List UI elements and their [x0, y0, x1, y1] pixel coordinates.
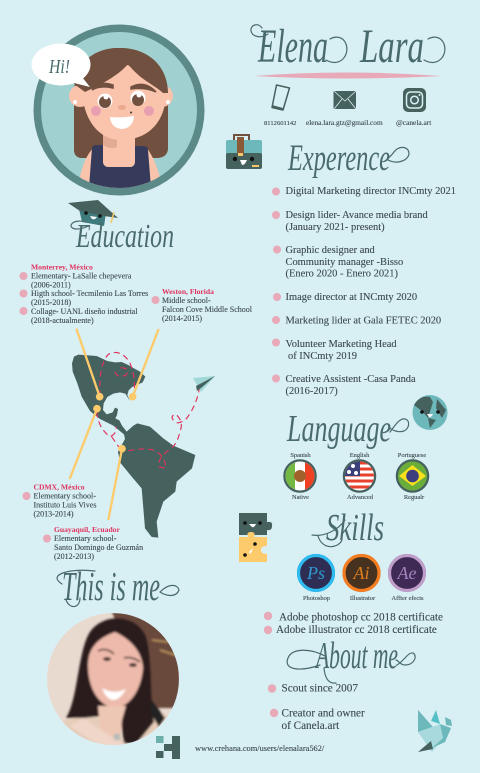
skill: Photoshop	[297, 554, 335, 602]
experience item 5: Marketing lider at Gala FETEC 2020	[286, 316, 441, 326]
skill: After effects	[388, 554, 426, 602]
education: CDMX: CDMX, México	[34, 482, 85, 492]
education: Monterrey: Collage- UANL diseño industrial	[31, 307, 138, 316]
skill: Photoshop: Photoshop	[303, 595, 330, 602]
experience item 6: Volunteer Marketing Head	[286, 339, 397, 350]
experience item 7: (2016-2017)	[286, 386, 338, 397]
education: Weston	[152, 287, 253, 323]
experience item 2: (January 2021- present)	[286, 222, 385, 233]
education: Monterrey: Higth school- Tecmilenio Las Torres	[31, 289, 148, 298]
skill: After effects: Affter efects	[392, 595, 424, 602]
dashed flight path	[97, 352, 199, 468]
list: experience	[272, 186, 456, 397]
language: Spanish: Native	[292, 494, 309, 501]
education: Monterrey: (2006-2011)	[31, 280, 71, 290]
language: Portuguese	[397, 452, 428, 501]
education: Guayaquil: Elementary school-	[54, 534, 117, 543]
heading: This is me	[57, 563, 179, 609]
education: CDMX: Elementary school-	[34, 492, 96, 500]
heading: Education	[71, 218, 174, 255]
education: Guayaquil: Guayaquil, Ecuador	[54, 525, 120, 534]
experience item 3	[273, 245, 403, 280]
skill: Illustrator	[342, 554, 380, 602]
list: about me	[268, 682, 365, 732]
list: certificates: Adobe photoshop cc 2018 certificate	[279, 612, 443, 624]
website link: www.crehana.com/users/elenalara562/	[195, 744, 325, 753]
list: about me: Scout since 2007	[282, 682, 358, 694]
name title: Lara	[359, 20, 424, 73]
icon: paper plane	[193, 376, 215, 392]
skill: Photoshop: Ps	[306, 563, 325, 583]
experience item 3: (Enero 2020 - Enero 2021)	[286, 268, 398, 280]
contact: instagram: @canela.art	[396, 118, 432, 127]
list: certificates	[264, 612, 443, 636]
experience item 4: Image director at INCmty 2020	[286, 292, 417, 303]
icon: puzzle pieces	[239, 513, 272, 562]
speech bubble: Hi!	[32, 44, 90, 87]
heading: Skills: Skills	[326, 507, 384, 549]
portrait avatar	[34, 24, 204, 200]
speech bubble: Hi!: Hi!	[48, 56, 70, 78]
icon: globe	[412, 395, 448, 430]
education: CDMX: Instituto Luis Vives	[34, 500, 96, 510]
heading: Education: Education	[75, 218, 174, 255]
icon: crehana logo	[156, 736, 180, 759]
heading: Language: Language	[286, 408, 391, 450]
education: Weston: Weston, Florida	[162, 287, 214, 296]
experience item 1: Digital Marketing director INCmty 2021	[286, 186, 456, 197]
language: Portuguese: Portuguese	[398, 452, 426, 459]
language: English: Advanced	[347, 494, 374, 501]
experience item 6: of INCmty 2019	[288, 351, 357, 362]
language: English	[344, 452, 375, 501]
education: Monterrey: Monterrey, México	[31, 262, 93, 272]
education: Guayaquil: (2012-2013)	[54, 552, 94, 561]
education: Monterrey: (2018-actualmente)	[31, 316, 94, 325]
language: English: English	[350, 452, 370, 459]
experience item 3: Community manager -Bisso	[286, 257, 403, 268]
heading: About me: About me	[314, 635, 398, 677]
experience item 7	[272, 374, 416, 397]
contact: email	[306, 91, 383, 127]
language: Spanish	[284, 452, 316, 501]
language: Portuguese: Regualr	[404, 494, 425, 501]
education: CDMX	[22, 482, 96, 518]
icon: briefcase	[226, 135, 262, 169]
education: Monterrey: Elementary- LaSalle chepevera	[31, 272, 132, 280]
contact: email: elena.lara.gtz@gmail.com	[306, 118, 383, 127]
location pins	[70, 329, 159, 520]
education: Weston: Falcon Cove Middle School	[162, 305, 253, 314]
contact: phone	[264, 85, 296, 127]
list: about me: of Canela.art	[282, 720, 340, 732]
education: Guayaquil	[43, 525, 143, 561]
education: Monterrey	[20, 262, 148, 325]
pink underline	[254, 72, 442, 78]
experience item 2	[272, 210, 428, 233]
experience item 7: Creative Assistent -Casa Panda	[286, 374, 416, 385]
skill: After effects: Ae	[397, 563, 417, 583]
contact: instagram	[396, 88, 432, 127]
name title	[251, 20, 445, 73]
list: about me: Creator and owner	[282, 708, 365, 720]
heading: This is me: This is me	[62, 563, 160, 609]
experience item 2: Design lider- Avance media brand	[286, 210, 428, 221]
skill: Illustrator: Ai	[352, 563, 370, 583]
list: certificates: Adobe illustrator cc 2018 certificate	[276, 624, 437, 636]
language: Spanish: Spanish	[290, 452, 311, 459]
icon: origami bird	[418, 710, 452, 752]
education: Weston: (2014-2015)	[162, 314, 202, 323]
icon: graduation cap	[68, 200, 118, 226]
experience item 3: Graphic designer and	[286, 245, 376, 256]
experience item 6	[272, 338, 397, 362]
education: CDMX: (2013-2014)	[34, 510, 74, 518]
education: Monterrey: (2015-2018)	[31, 298, 71, 307]
skill: Illustrator: Illustrator	[350, 595, 376, 602]
name title: Elena	[257, 20, 328, 73]
heading: Skills	[312, 507, 384, 549]
contact: phone: 8112601142	[264, 120, 296, 127]
education: Weston: Middle school-	[162, 296, 211, 305]
heading: Experience: Experence	[287, 138, 390, 179]
photo portrait	[46, 612, 180, 746]
education: Guayaquil: Santo Domingo de Guzmán	[54, 543, 143, 552]
heading: About me	[287, 635, 415, 683]
map: the Americas	[70, 329, 199, 538]
